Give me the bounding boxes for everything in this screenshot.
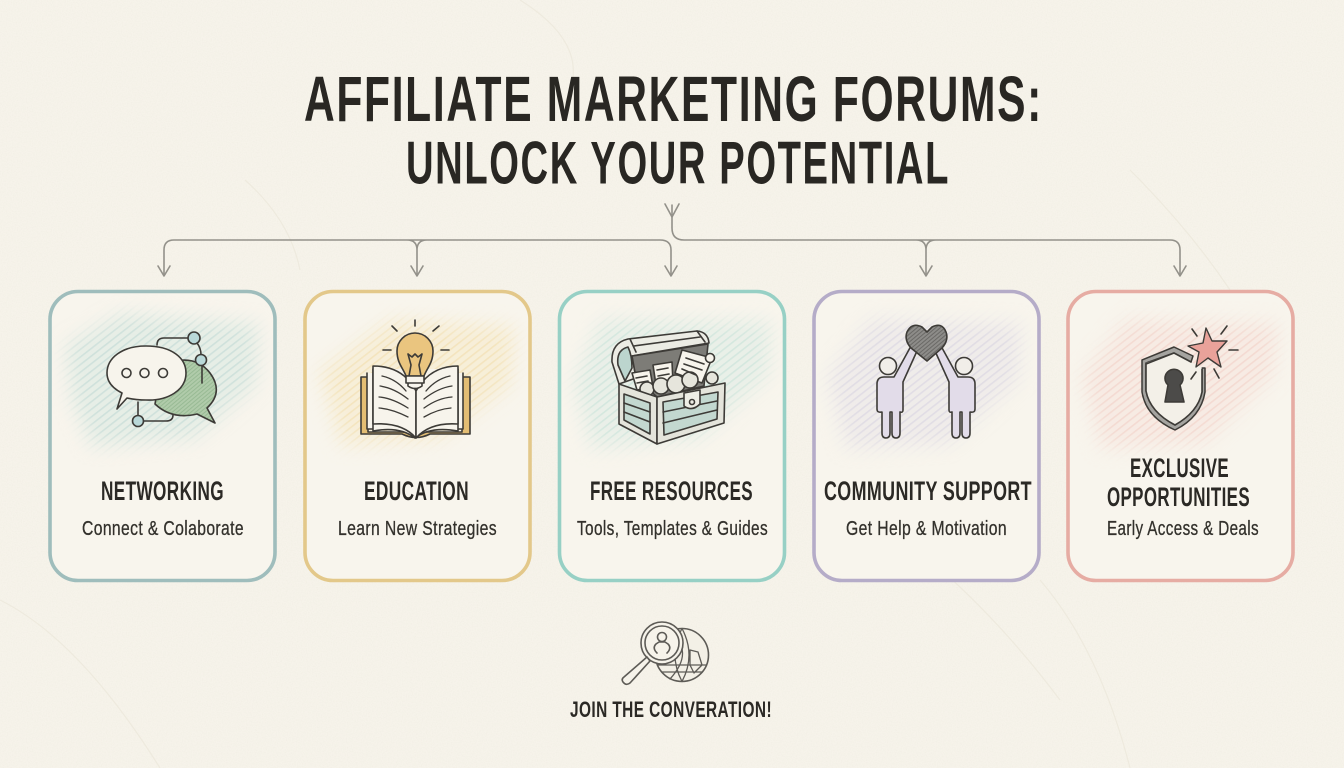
pastel hatch: community support <box>826 316 1024 451</box>
icon: shield with keyhole and star <box>1142 326 1238 430</box>
icon: magnifier over globe <box>622 622 708 684</box>
subtext: free resources: Tools, Templates & Guides <box>577 517 768 540</box>
pastel hatch: free resources <box>570 314 776 454</box>
panel: exclusive opportunities: OPPORTUNITIES <box>1107 482 1250 512</box>
pastel hatch: education <box>315 312 521 452</box>
icon: treasure chest <box>612 331 725 444</box>
heading: community support: COMMUNITY SUPPORT <box>824 476 1032 506</box>
panel: exclusive opportunities <box>1068 292 1293 580</box>
panel: education <box>305 292 530 580</box>
title <box>304 63 1043 196</box>
connector arrows from title to cards <box>158 204 1186 276</box>
panel: networking <box>50 292 275 580</box>
subtext: networking: Connect & Colaborate <box>82 517 244 540</box>
panel: free resources <box>560 292 784 580</box>
heading: education: EDUCATION <box>364 476 469 506</box>
heading: free resources: FREE RESOURCES <box>590 476 753 506</box>
heading: exclusive opportunities: EXCLUSIVE <box>1130 453 1229 483</box>
pastel hatch: networking <box>60 308 264 452</box>
icon: chat bubbles and nodes <box>107 332 216 426</box>
heading: networking: NETWORKING <box>101 476 224 506</box>
panel: community support <box>814 292 1039 580</box>
subtext: education: Learn New Strategies <box>338 517 497 540</box>
subtext: community support: Get Help & Motivation <box>846 517 1007 540</box>
icon: open book with light bulb <box>361 320 470 438</box>
title: UNLOCK YOUR POTENTIAL <box>406 130 950 196</box>
call to action: JOIN THE CONVERATION! <box>570 697 772 722</box>
icon: two people lifting a heart <box>877 325 975 438</box>
subtext: exclusive opportunities: Early Access & Deals <box>1107 517 1259 540</box>
pastel hatch: exclusive opportunities <box>1080 316 1281 452</box>
